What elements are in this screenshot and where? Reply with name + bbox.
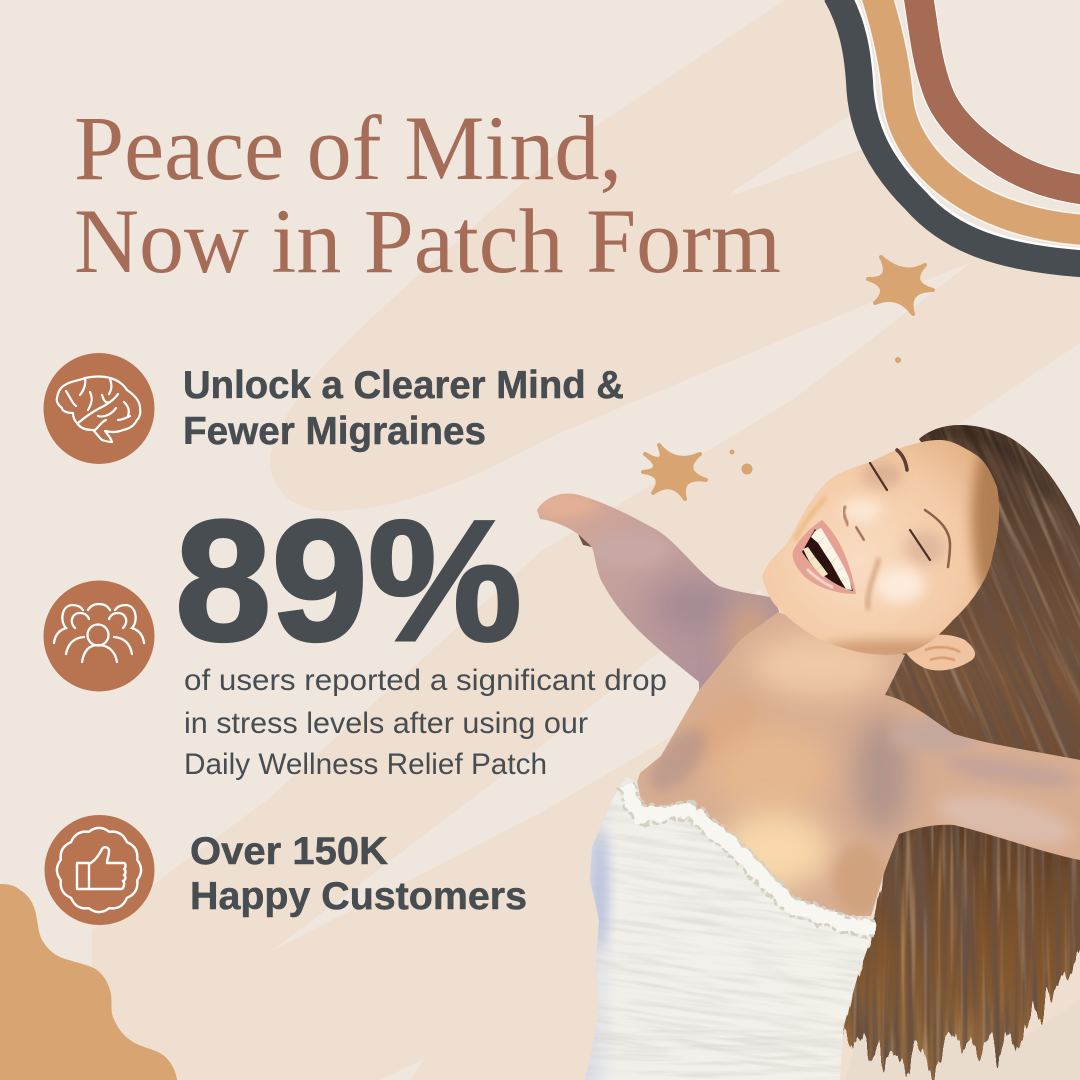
left arm [537, 494, 780, 690]
star decoration middle [643, 445, 706, 499]
confetti dots [730, 357, 901, 474]
stat description [184, 664, 667, 781]
stat description: of users reported a significant drop [184, 664, 667, 697]
bottom left blob [0, 884, 177, 1080]
chest and right arm [630, 600, 1080, 930]
text: happy customers: Happy Customers [190, 875, 527, 918]
big stat 89%: 89% [175, 485, 522, 677]
rainbow arcs top right [836, 0, 1080, 264]
icon: people group [44, 580, 154, 692]
star decoration top [868, 257, 933, 314]
title: Peace of Mind, [74, 97, 622, 199]
stat description: Daily Wellness Relief Patch [184, 748, 547, 781]
icon: thumbs up badge [44, 815, 154, 925]
text: happy customers: Over 150K [190, 830, 388, 873]
title: Now in Patch Form [74, 190, 781, 292]
text: clearer mind: Unlock a Clearer Mind & [183, 364, 624, 407]
text: clearer mind: Fewer Migraines [183, 410, 486, 453]
text: clearer mind [183, 364, 624, 453]
face [762, 440, 999, 655]
title [74, 97, 781, 292]
smile [793, 520, 856, 594]
ear [902, 635, 975, 671]
stat description: in stress levels after using our [184, 707, 588, 740]
photo: smiling woman [537, 425, 1080, 1080]
white dress [585, 777, 876, 1080]
text: happy customers [190, 830, 527, 918]
hair below arm [843, 824, 1080, 1080]
icon: brain [44, 353, 154, 464]
dress ruffle [626, 785, 874, 928]
hair above arm [885, 425, 1080, 760]
